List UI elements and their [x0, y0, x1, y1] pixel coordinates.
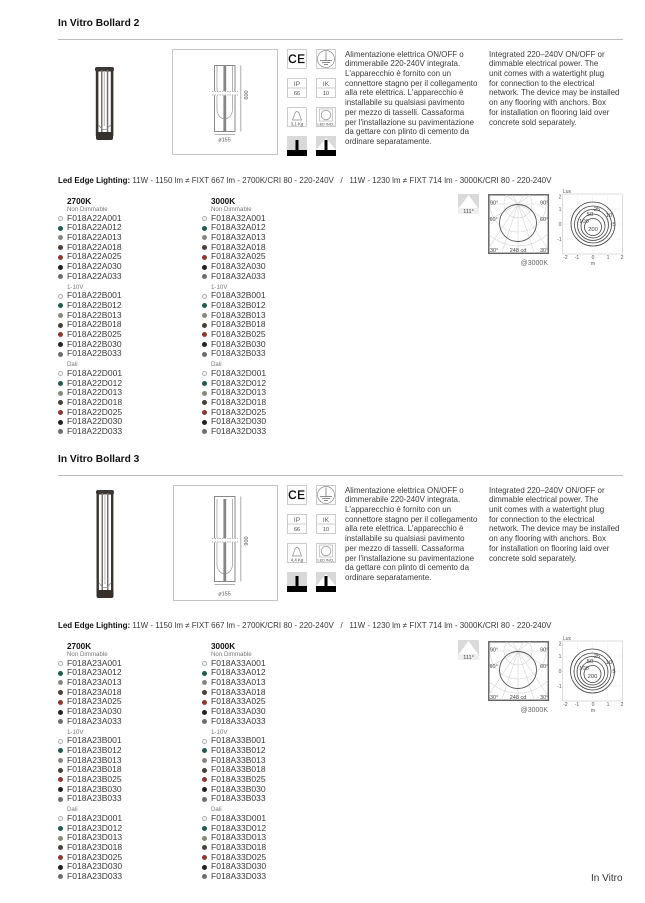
group: Non Dimmable: F018A22A012	[67, 222, 122, 232]
description: Italian: Alimentazione elettrica ON/OFF o	[345, 50, 464, 58]
group: Dali: F018A23D030	[67, 861, 122, 871]
group: Non Dimmable: F018A23A033	[67, 716, 122, 726]
description: Italian: alla rete elettrica. L'apparecchio è	[345, 88, 463, 97]
section: In Vitro Bollard 3	[58, 454, 624, 881]
description: Italian: installabile su qualsiasi pavimento	[345, 534, 465, 543]
chart: illuminance contour: 100	[579, 219, 589, 225]
group: Non Dimmable: Non Dimmable	[67, 651, 108, 658]
group: 1-10V: F018A33B025	[211, 774, 266, 784]
group: Non Dimmable: F018A22A033	[67, 271, 122, 281]
icon: light distribution narrow	[287, 136, 307, 156]
chart: illuminance contour: 0	[559, 668, 562, 674]
chart: illuminance contour: 5	[612, 668, 616, 674]
product photo: bollard 900	[96, 490, 114, 598]
group: Dali: F018A23D033	[67, 871, 122, 881]
chart: illuminance contour: -1	[575, 255, 579, 261]
chart: illuminance contour: -1	[557, 237, 562, 243]
group: 1-10V: F018A33B013	[211, 755, 266, 765]
group: 1-10V	[202, 729, 266, 803]
group: Dali: F018A33D012	[211, 823, 266, 833]
group: Dali: F018A22D012	[67, 378, 122, 388]
technical drawing: bollard 600: ø155	[218, 138, 231, 144]
chart: illuminance contour: 100	[579, 666, 589, 672]
group: Dali: F018A22D030	[67, 416, 122, 426]
description: Italian	[345, 486, 478, 582]
group: Dali: F018A22D018	[67, 397, 122, 407]
group: 1-10V: F018A22B013	[67, 310, 122, 320]
group: Non Dimmable: F018A22A030	[67, 261, 122, 271]
chart: polar light distribution: 30°	[540, 248, 548, 254]
group: Non Dimmable: F018A23A013	[67, 677, 122, 687]
group: 1-10V	[58, 729, 122, 803]
group: Non Dimmable: F018A32A018	[211, 242, 266, 252]
technical drawing: bollard 600	[172, 49, 278, 155]
description: English: for installation on flooring laid over	[489, 108, 609, 117]
chart: polar light distribution: @3000K	[521, 706, 548, 714]
description: Italian: per mezzo di tasselli. Cassaforma	[345, 544, 464, 553]
icon: IK 10: IK	[323, 516, 330, 524]
icon: LED included: LED INCL	[317, 122, 335, 126]
chart: illuminance contour: 1	[607, 255, 610, 261]
description: Italian: connettore stagno per il collegamento	[345, 79, 477, 88]
chart: illuminance contour: Lux	[563, 636, 572, 642]
chart: polar light distribution: @3000K	[521, 260, 548, 267]
icon: IK 10: 10	[323, 526, 329, 532]
group: Dali: Dali	[211, 806, 222, 813]
description: English: dimmable electrical power. The	[489, 495, 598, 504]
icon: weight 4,4 Kg: 4,4 Kg	[291, 557, 304, 562]
group: Non Dimmable: F018A33A012	[211, 667, 266, 677]
description: English: Integrated 220–240V ON/OFF or	[489, 486, 605, 494]
group: Non Dimmable	[58, 206, 122, 281]
group: 1-10V: F018A33B030	[211, 784, 266, 794]
icon: light distribution wide	[316, 136, 336, 156]
technical drawing: bollard 900: 900	[244, 536, 250, 546]
group: Non Dimmable: F018A32A033	[211, 271, 266, 281]
chart: illuminance contour: 2	[559, 194, 562, 200]
group: Dali: Dali	[67, 361, 78, 368]
description: Italian: per l'installazione su pavimentazione	[345, 118, 474, 127]
group: Dali: F018A23D012	[67, 823, 122, 833]
description: English: unit comes with a watertight plug	[489, 69, 604, 78]
group: Dali: F018A32D013	[211, 387, 266, 397]
chart: polar light distribution: 90°	[540, 200, 548, 206]
description: English: for installation on flooring laid over	[489, 544, 609, 553]
description: English: network. The device may be installed	[489, 88, 619, 97]
chart: polar light distribution: 60°	[540, 217, 548, 223]
description: Italian: da gettare con plinto di cemento da	[345, 563, 469, 572]
group: Dali: Dali	[211, 361, 222, 368]
group: Non Dimmable: Non Dimmable	[67, 206, 108, 213]
chart: illuminance contour: 25	[594, 654, 600, 660]
group: 1-10V: F018A22B025	[67, 329, 122, 339]
group: Non Dimmable: F018A22A025	[67, 251, 122, 261]
description: Italian: connettore stagno per il collegamento	[345, 515, 477, 524]
chart: illuminance contour: 0	[592, 702, 595, 708]
group: 1-10V: F018A32B012	[211, 300, 266, 310]
chart: illuminance contour: 50	[587, 212, 593, 218]
chart: polar light distribution	[488, 641, 550, 714]
group: Non Dimmable: F018A33A033	[211, 716, 266, 726]
group: 1-10V: F018A22B018	[67, 319, 122, 329]
description: Italian: L'apparecchio è fornito con un	[345, 69, 451, 78]
group: 1-10V: F018A32B001	[211, 290, 266, 300]
description: English: on any flooring with anchors. Box	[489, 534, 606, 543]
group: Non Dimmable: F018A22A013	[67, 232, 122, 242]
group: Dali: F018A33D013	[211, 832, 266, 842]
group: Dali: F018A22D001	[67, 368, 122, 378]
chart: illuminance contour: Lux	[563, 189, 572, 195]
description: Italian: Alimentazione elettrica ON/OFF o	[345, 486, 464, 494]
code list: 2700K: 2700K	[67, 642, 91, 651]
chart: illuminance contour: 200	[588, 227, 598, 233]
group: Non Dimmable: F018A33A025	[211, 696, 266, 706]
chart: illuminance contour: 1	[607, 702, 610, 708]
chart: illuminance contour: -2	[563, 702, 568, 708]
group: Non Dimmable: F018A32A030	[211, 261, 266, 271]
description: Italian: dimmerabile 220-240V integrata.	[345, 495, 460, 504]
group: Dali: F018A22D013	[67, 387, 122, 397]
group: 1-10V	[58, 284, 122, 358]
code list: 3000K: 3000K	[211, 197, 235, 206]
group: Non Dimmable	[202, 206, 266, 281]
icon: ground symbol	[316, 50, 336, 68]
icon: light distribution narrow	[287, 572, 307, 592]
group: 1-10V: F018A22B033	[67, 348, 122, 358]
chart: polar light distribution: 30°	[540, 694, 548, 700]
certification icons	[287, 485, 336, 592]
chart: illuminance contour: 200	[588, 674, 597, 680]
chart: polar light distribution: 248 cd	[510, 248, 526, 254]
chart: illuminance contour: m	[591, 261, 595, 267]
group: 1-10V: F018A33B001	[211, 735, 266, 745]
chart: polar light distribution: 30°	[490, 694, 498, 700]
group: 1-10V: F018A33B018	[211, 764, 266, 774]
icon: IP 66: IP	[294, 81, 300, 88]
group: Non Dimmable: F018A22A001	[67, 213, 122, 223]
description: English	[489, 486, 619, 563]
group: Non Dimmable: F018A33A018	[211, 687, 266, 697]
group: Non Dimmable	[58, 651, 122, 726]
description: English: dimmable electrical power. The	[489, 59, 598, 68]
icon: CE mark: CE	[288, 490, 306, 502]
chart: polar light distribution: 60°	[490, 217, 498, 223]
chart: polar light distribution: 248 cd	[510, 694, 526, 700]
chart: illuminance contour: 2	[559, 641, 562, 647]
code list: 3000K	[202, 197, 266, 436]
heading: In Vitro Bollard 2: In Vitro Bollard 2	[58, 18, 139, 29]
group: Non Dimmable: F018A23A001	[67, 658, 122, 668]
group: Dali: F018A33D033	[211, 871, 266, 881]
code list: 2700K	[58, 642, 122, 881]
icon: IP 66	[288, 514, 306, 533]
group: Dali: Dali	[67, 806, 78, 813]
group: 1-10V: F018A33B033	[211, 793, 266, 803]
group: 1-10V: F018A23B012	[67, 745, 122, 755]
group: Dali: F018A22D033	[67, 426, 122, 436]
chart: illuminance contour: 10	[606, 660, 612, 666]
chart: polar light distribution: 30°	[490, 248, 498, 254]
group: Dali: F018A23D013	[67, 832, 122, 842]
group: 1-10V: F018A23B018	[67, 764, 122, 774]
group: Dali: F018A23D001	[67, 813, 122, 823]
footer: In Vitro: In Vitro	[591, 873, 622, 884]
group: Non Dimmable: F018A32A012	[211, 222, 266, 232]
group: 1-10V: F018A23B033	[67, 793, 122, 803]
code list: 2700K	[58, 197, 122, 436]
group: Dali: F018A32D030	[211, 416, 266, 426]
group: 1-10V: F018A22B030	[67, 339, 122, 349]
group: Dali: F018A32D018	[211, 397, 266, 407]
description: Italian: ordinare separatamente.	[345, 573, 431, 582]
group: Dali	[202, 806, 266, 881]
group: Dali: F018A22D025	[67, 407, 122, 417]
icon: beam angle 111°	[458, 640, 479, 661]
group: Dali: F018A32D012	[211, 378, 266, 388]
chart: illuminance contour: 2	[621, 702, 624, 708]
product photo: bollard 600	[95, 67, 114, 140]
description: Italian: per mezzo di tasselli. Cassaforma	[345, 108, 464, 117]
icon: beam angle 111°	[458, 194, 479, 215]
chart: illuminance contour: 50	[587, 658, 593, 664]
chart: polar light distribution: 90°	[540, 647, 548, 653]
certification icons	[287, 49, 336, 156]
group: 1-10V: 1-10V	[211, 729, 227, 736]
group: Non Dimmable: Non Dimmable	[211, 206, 252, 213]
group: Dali: F018A32D025	[211, 407, 266, 417]
code list: 3000K: 3000K	[211, 642, 235, 651]
group: 1-10V: 1-10V	[211, 284, 227, 291]
description: Italian: ordinare separatamente.	[345, 137, 431, 146]
chart: polar light distribution	[488, 194, 550, 267]
technical drawing: bollard 600: 600	[244, 90, 250, 100]
icon: IK 10	[316, 78, 336, 98]
chart: illuminance contour: 2	[621, 255, 624, 261]
group: 1-10V: F018A23B030	[67, 784, 122, 794]
chart: polar light distribution: 60°	[490, 664, 498, 670]
group: 1-10V: F018A32B013	[211, 310, 266, 320]
group: Non Dimmable: F018A23A030	[67, 706, 122, 716]
group: Dali: F018A32D001	[211, 368, 266, 378]
description: Italian: da gettare con plinto di cemento da	[345, 127, 469, 136]
group: 1-10V: F018A32B025	[211, 329, 266, 339]
chart: illuminance contour: 0	[592, 255, 595, 261]
chart: illuminance contour: 1	[559, 654, 562, 660]
section: In Vitro Bollard 2	[58, 18, 624, 436]
icon: IP 66	[288, 78, 306, 98]
group: 1-10V: F018A23B013	[67, 755, 122, 765]
technical drawing: bollard 900: ø155	[218, 592, 231, 598]
group: Dali: F018A33D025	[211, 852, 266, 862]
group: 1-10V: F018A33B012	[211, 745, 266, 755]
group: Non Dimmable: F018A32A025	[211, 251, 266, 261]
group: Dali: F018A32D033	[211, 426, 266, 436]
specification line: Led Edge Lighting: Led Edge Lighting: 11W - 1150 lm ≠ FIXT 667 lm - 2700K/CRI 80 - 220-240V / 11W - 1230 lm ≠ FIXT 714 lm - 3000K/CRI 80 - 220-240V	[58, 176, 551, 184]
description: English: concrete sold separately.	[489, 118, 577, 127]
description: Italian: alla rete elettrica. L'apparecchio è	[345, 524, 463, 533]
group: Non Dimmable: Non Dimmable	[211, 651, 252, 658]
heading: In Vitro Bollard 3: In Vitro Bollard 3	[58, 454, 139, 465]
chart: polar light distribution: 60°	[540, 664, 548, 670]
chart: illuminance contour: 0	[559, 222, 562, 228]
group: Dali: F018A33D018	[211, 842, 266, 852]
group: Dali: F018A33D001	[211, 813, 266, 823]
icon: IP 66: 66	[294, 91, 300, 97]
group: 1-10V: F018A23B001	[67, 735, 122, 745]
chart: illuminance contour: -1	[557, 684, 562, 690]
group: 1-10V: F018A32B033	[211, 348, 266, 358]
icon: weight 3,1 Kg: 3,1 Kg	[291, 122, 304, 126]
group: 1-10V: F018A22B012	[67, 300, 122, 310]
chart: polar light distribution: 90°	[490, 200, 498, 206]
icon: CE mark: CE	[288, 54, 306, 66]
group: Non Dimmable: F018A33A013	[211, 677, 266, 687]
group: Dali: F018A33D030	[211, 861, 266, 871]
group: Dali	[202, 361, 266, 436]
chart: illuminance contour: 1	[559, 207, 562, 213]
group: Non Dimmable: F018A22A018	[67, 242, 122, 252]
group: Non Dimmable: F018A32A013	[211, 232, 266, 242]
group: Non Dimmable: F018A23A018	[67, 687, 122, 697]
group: Dali: F018A23D025	[67, 852, 122, 862]
icon: ground symbol	[316, 485, 336, 504]
group: Non Dimmable: F018A23A012	[67, 667, 122, 677]
chart: illuminance contour: -1	[575, 702, 579, 708]
icon: beam angle 111°: 111°	[463, 655, 474, 661]
group: Non Dimmable: F018A23A025	[67, 696, 122, 706]
group: Non Dimmable	[202, 651, 266, 726]
description: English: on any flooring with anchors. Box	[489, 98, 606, 107]
technical drawing: bollard 900	[173, 485, 278, 601]
description: English: unit comes with a watertight plug	[489, 505, 604, 514]
chart: illuminance contour: 5	[612, 222, 616, 228]
chart: illuminance contour: m	[591, 708, 595, 714]
specification line: Led Edge Lighting: Led Edge Lighting: 11W - 1150 lm ≠ FIXT 667 lm - 2700K/CRI 80 - 220-240V / 11W - 1230 lm ≠ FIXT 714 lm - 3000K/CRI 80 - 220-240V	[58, 621, 551, 630]
icon: IK 10: IK	[323, 81, 330, 88]
description: English: for connection to the electrical	[489, 79, 594, 88]
chart: illuminance contour	[557, 189, 624, 267]
code list: 3000K	[202, 642, 266, 881]
description: English: concrete sold separately.	[489, 554, 577, 563]
chart: illuminance contour: 10	[606, 213, 612, 219]
group: Dali: F018A23D018	[67, 842, 122, 852]
group: Dali	[58, 806, 122, 881]
code list: 2700K: 2700K	[67, 197, 91, 206]
icon: IP 66: IP	[294, 516, 300, 524]
group: 1-10V: F018A22B001	[67, 290, 122, 300]
group: 1-10V	[202, 284, 266, 358]
description: Italian: installabile su qualsiasi pavimento	[345, 98, 465, 107]
chart: illuminance contour: -2	[563, 255, 568, 261]
group: 1-10V: F018A32B018	[211, 319, 266, 329]
icon: IK 10	[316, 514, 336, 533]
icon: IP 66: 66	[294, 526, 300, 532]
icon: light distribution wide	[316, 572, 336, 592]
description: Italian	[345, 50, 478, 146]
group: Non Dimmable: F018A33A001	[211, 658, 266, 668]
group: 1-10V: 1-10V	[67, 284, 83, 291]
description: Italian: L'apparecchio è fornito con un	[345, 505, 451, 514]
icon: IK 10: 10	[323, 91, 329, 97]
description: English: Integrated 220–240V ON/OFF or	[489, 50, 605, 58]
group: Dali	[58, 361, 122, 436]
icon: LED included: LED INCL	[317, 558, 335, 562]
group: 1-10V: F018A23B025	[67, 774, 122, 784]
group: Non Dimmable: F018A33A030	[211, 706, 266, 716]
chart: polar light distribution: 90°	[490, 647, 498, 653]
chart: illuminance contour	[557, 636, 624, 714]
chart: illuminance contour: 25	[594, 207, 600, 213]
group: 1-10V: 1-10V	[67, 729, 83, 736]
description: Italian: dimmerabile 220-240V integrata.	[345, 59, 460, 68]
description: English: network. The device may be installed	[489, 524, 619, 533]
description: Italian: per l'installazione su pavimentazione	[345, 554, 474, 563]
group: 1-10V: F018A32B030	[211, 339, 266, 349]
description: English	[489, 50, 619, 127]
icon: beam angle 111°: 111°	[463, 209, 474, 215]
group: Non Dimmable: F018A32A001	[211, 213, 266, 223]
description: English: for connection to the electrical	[489, 515, 594, 524]
